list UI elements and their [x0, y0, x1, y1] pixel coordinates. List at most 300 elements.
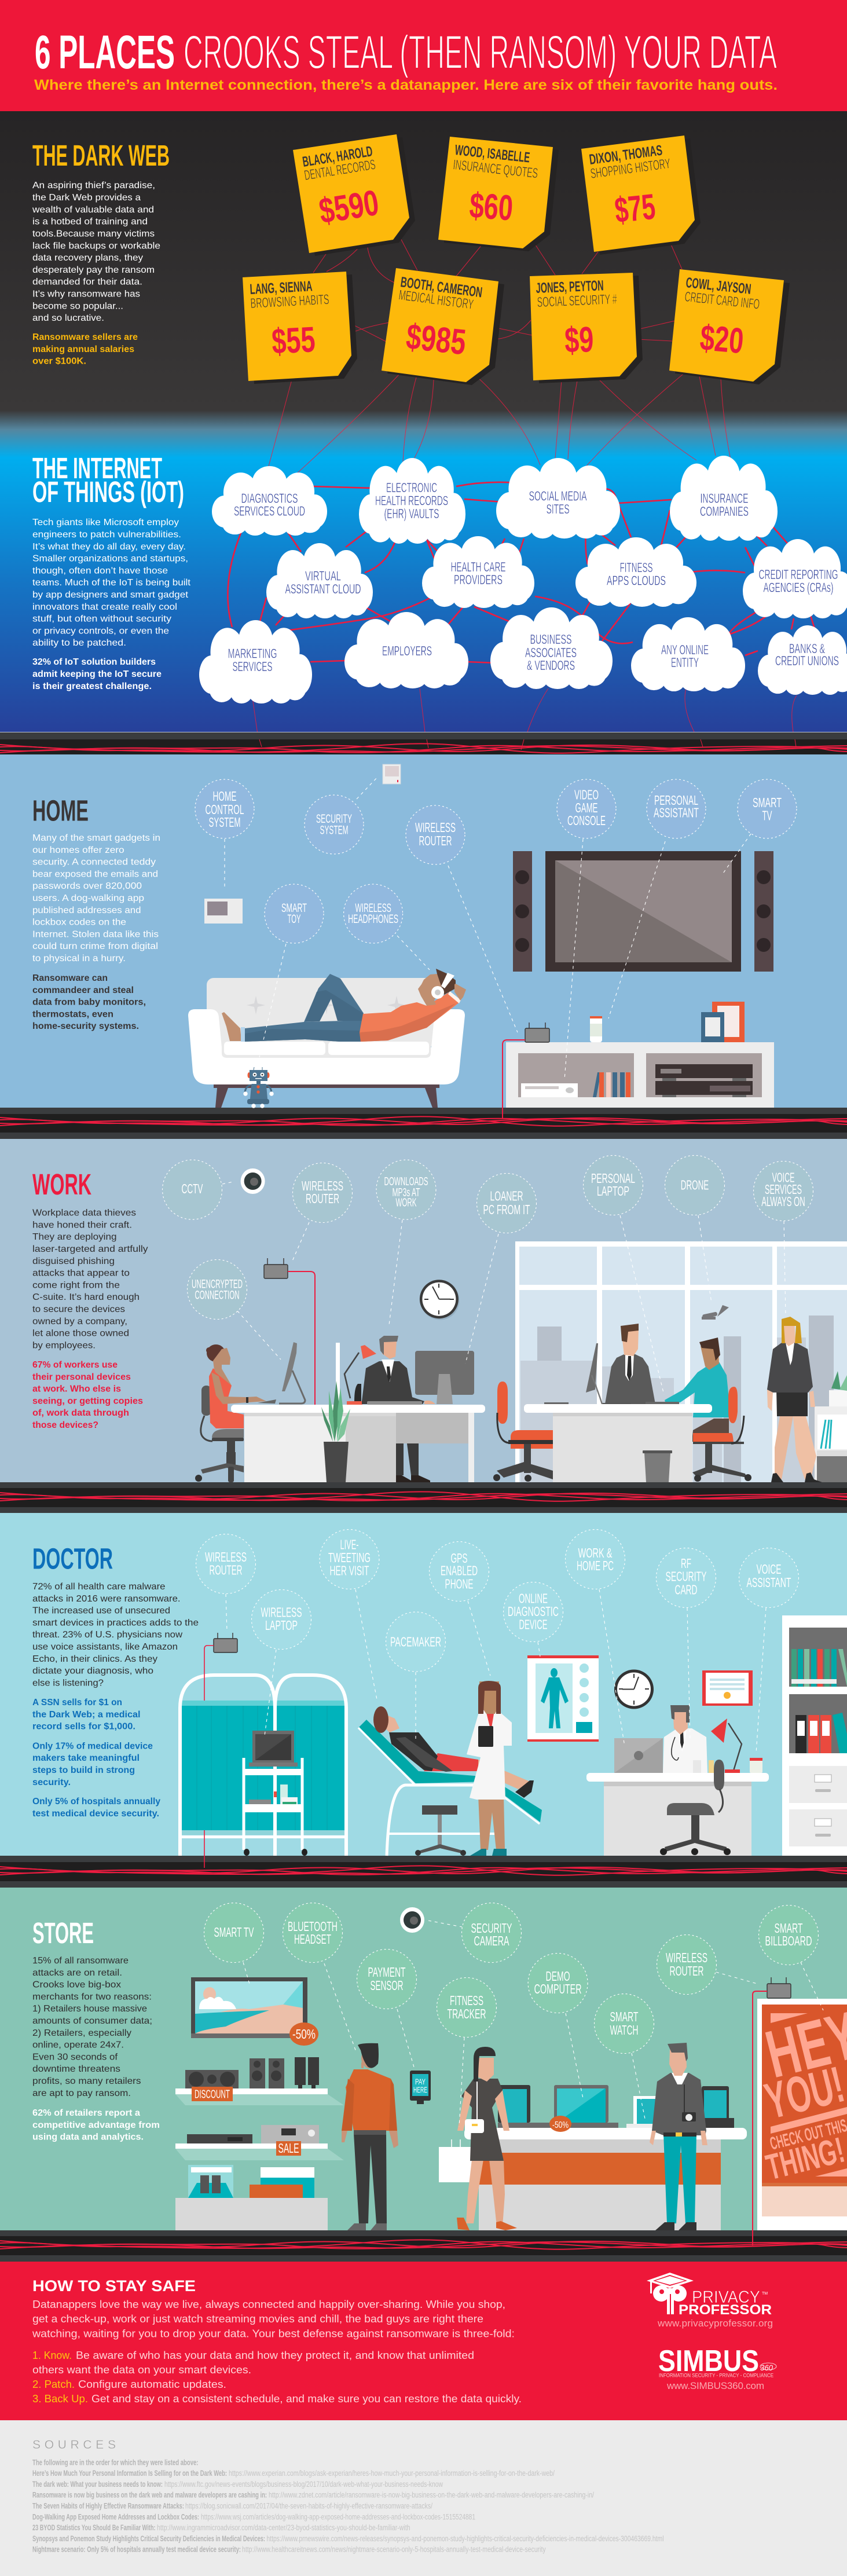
panel: how to stay safe: [0, 2262, 847, 2420]
text block: doctor body: attacks in 2016 were ransomware.: [32, 1594, 181, 1604]
icon: framed certificate: [702, 1670, 753, 1706]
logo: simbus 360: INFORMATION SECURITY - PRIVACY - COMPLIANCE: [659, 2373, 773, 2379]
note: dixon thomas: DIXON, THOMAS: [588, 142, 663, 168]
text block: stay safe intro: get a check-up, work or just watch streaming movies and chill, the bad guys are right there: [32, 2313, 483, 2325]
heading: how to stay safe: HOW TO STAY SAFE: [32, 2277, 196, 2295]
text block: work body: [32, 1208, 148, 1350]
illustration: bookcase: [782, 1615, 847, 1856]
callout: personal devices at work: [32, 1360, 143, 1430]
icon: security camera: [241, 1168, 265, 1194]
floor bands with wires: [0, 732, 847, 2262]
icon: router and red wire: [264, 1258, 315, 1405]
bubble: gps enabled phone: GPS: [450, 1551, 468, 1566]
wire: router to floor: [503, 1040, 525, 1119]
bubble: smart tv: [204, 1903, 264, 1963]
panel: work: [0, 1139, 847, 1482]
list: source citations: https://blog.sonicwall.com/2017/04/the-seven-habits-of-highly-effective-ransomware-attacks/: [185, 2501, 432, 2511]
bubble: pacemaker: PACEMAKER: [390, 1635, 441, 1650]
logo: privacy professor: TM: [762, 2292, 768, 2296]
text block: work body: have honed their craft.: [32, 1220, 132, 1230]
bubble: home control system: HOME: [213, 789, 236, 804]
cloud: business associates: & VENDORS: [527, 658, 575, 673]
text block: store body: 1) Retailers house massive: [32, 2004, 147, 2014]
text block: dark web body: the Dark Web provides a: [32, 193, 141, 203]
bubble: smart toy: TOY: [287, 913, 301, 926]
note: booth cameron: BOOTH, CAMERON: [399, 274, 483, 301]
bubble: wireless router: [406, 805, 465, 864]
bubble: rf security card: SECURITY: [666, 1569, 706, 1584]
cloud: health care providers: HEALTH CARE: [450, 559, 506, 574]
tag: discount: [192, 2087, 233, 2101]
bubble: smart tv: SMART TV: [214, 1925, 254, 1940]
text block: dark web body: tools.Because many victims: [32, 229, 155, 239]
callout: ransomware salaries: [32, 332, 138, 367]
callout: iot solution builders: [32, 657, 162, 691]
bubble: voice services always on: SERVICES: [765, 1182, 802, 1197]
text block: dark web body: become so popular...: [32, 301, 123, 311]
text block: iot body: Smaller organizations and startups,: [32, 554, 188, 564]
cloud: social media sites: SITES: [547, 501, 570, 516]
bubble: cctv: CCTV: [182, 1181, 203, 1196]
bubble: home control system: [195, 779, 254, 838]
heading: work: WORK: [32, 1168, 91, 1201]
bubble: fitness tracker: TRACKER: [447, 2006, 486, 2021]
bubble: loaner pc from it: PC FROM IT: [483, 1202, 530, 1217]
text block: work body: They are deploying: [32, 1232, 117, 1242]
bubble: wireless router: WIRELESS: [415, 820, 456, 835]
text block: doctor body: dictate your diagnosis, who: [32, 1666, 153, 1676]
note: jones peyton: $9: [564, 320, 594, 361]
list: three-fold defense: 1. Know.: [32, 2350, 72, 2361]
text block: iot body: though, often don’t have those: [32, 566, 168, 576]
bubble: security system: [305, 795, 364, 854]
heading: doctor: DOCTOR: [32, 1542, 113, 1575]
cloud: credit reporting agencies: [743, 539, 847, 618]
illustration: boxes on stand: [175, 2165, 328, 2230]
bubble: wireless router: [293, 1163, 352, 1223]
note: cowl jayson: [669, 269, 790, 384]
badge: minus fifty percent on laptop: [549, 2116, 571, 2132]
bubble: live tweeting her visit: [320, 1530, 379, 1589]
bubble: pacemaker: [386, 1612, 446, 1672]
bubble: loaner pc from it: [477, 1173, 536, 1233]
callout: personal devices at work: seeing, or getting copies: [32, 1396, 143, 1406]
bubble: voice services always on: [754, 1161, 813, 1221]
note: lang sienna: $55: [271, 320, 316, 362]
text block: stay safe intro: Datanappers love the way we live, always connected and happily over-sharing. While you shop,: [32, 2299, 505, 2310]
illustration: desk and chair: [586, 1760, 769, 1856]
bubble: wireless router: ROUTER: [306, 1191, 339, 1206]
bubble: rf security card: RF: [681, 1556, 691, 1571]
cloud: marketing services: [199, 620, 312, 703]
text block: home body: lockbox codes on the: [32, 918, 126, 928]
bubble: smart toy: SMART: [281, 902, 307, 915]
bubble: security camera: CAMERA: [474, 1933, 509, 1948]
list: source citations: Here’s How Much Your Personal Information Is Selling for on the Dark Web:: [32, 2469, 227, 2478]
text block: home body: users. A dog-walking app: [32, 893, 144, 903]
text block: iot body: innovators that create really cool: [32, 602, 177, 612]
text block: doctor body: Echo, in their clinics. As they: [32, 1654, 157, 1664]
bubble: wireless router: ROUTER: [669, 1963, 704, 1978]
text block: home body: to physical in a hurry.: [32, 954, 126, 963]
bubble: unencrypted connection: [188, 1260, 247, 1319]
bubble: drone: [665, 1156, 725, 1215]
bubble: payment sensor: [357, 1949, 417, 2009]
callout: ssn price: [32, 1698, 140, 1732]
list: source citations: Ransomware is now big business on the dark web and malware developers are cashing in:: [32, 2491, 267, 2500]
list: source citations: https://www.prnewswire.com/news-releases/synopsys-and-ponemon-study-highlights-critical-security-deficiencies-in-medical-devices-300463669.html: [266, 2534, 663, 2543]
illustration: patient: [373, 1706, 534, 1798]
cloud: fitness apps: [575, 537, 696, 607]
list: source citations: https://www.ftc.gov/news-events/blogs/business-blog/2017/10/dark-web-what-your-business-needs-know: [164, 2480, 443, 2489]
text block: iot body: by app designers and smart gadget: [32, 590, 189, 600]
heading: the internet of things: THE INTERNET: [32, 452, 162, 485]
list: three-fold defense: [32, 2350, 522, 2405]
bubble: unencrypted connection: UNENCRYPTED: [192, 1277, 243, 1291]
panel: header: [0, 0, 847, 111]
text block: dark web body: demanded for their data.: [32, 277, 142, 287]
illustration: smart tv: [191, 1977, 307, 2038]
list: three-fold defense: 3. Back Up.: [32, 2393, 88, 2405]
illustration: curtain and cart: [180, 1675, 347, 1856]
callout: ssn price: the Dark Web; a medical: [32, 1710, 140, 1720]
note: black harold: BLACK, HAROLD: [302, 143, 373, 170]
illustration: left desk: [231, 1405, 485, 1482]
tag: discount: DISCOUNT: [195, 2088, 230, 2101]
illustration: smart billboard: [757, 1997, 847, 2230]
bubble: security system: SECURITY: [316, 812, 352, 826]
text block: iot body: It’s what they do all day, every day.: [32, 542, 186, 552]
bubble: drone: DRONE: [681, 1178, 709, 1193]
bubble: smart billboard: SMART: [775, 1921, 802, 1936]
note: booth cameron: $985: [404, 317, 468, 362]
bubble: smart watch: WATCH: [610, 2022, 638, 2038]
bubble: wireless headphones: WIRELESS: [355, 902, 391, 915]
note: wood isabelle: WOOD, ISABELLE: [454, 142, 531, 166]
text block: doctor body: [32, 1582, 199, 1688]
icon: wall clock: [420, 1280, 460, 1320]
text block: work body: disguised phishing: [32, 1256, 115, 1266]
illustration: doctor at desk: [614, 1705, 762, 1773]
bubble: voice assistant: [739, 1548, 799, 1607]
list: three-fold defense: 2. Patch.: [32, 2379, 75, 2390]
callout: iot solution builders: 32% of IoT solution builders: [32, 657, 156, 667]
cloud: fitness apps: APPS CLOUDS: [607, 573, 666, 588]
text block: stay safe intro: watching, waiting for you to drop your data. Your best defense against ransomware is three-fold:: [32, 2328, 515, 2339]
illustration: potted plant: [321, 1381, 350, 1482]
heading: sources: SOURCES: [32, 2438, 116, 2452]
bubble: downloads mp3s at work: WORK: [396, 1197, 417, 1210]
icon: router and red wire: [204, 1633, 237, 1868]
cloud: employers: [344, 612, 468, 688]
text block: store body: Crooks love big-box: [32, 1980, 121, 1990]
bubble: gps enabled phone: PHONE: [445, 1577, 474, 1592]
callout: retailers competitive advantage: [32, 2108, 160, 2142]
bubble: video game console: GAME: [575, 800, 597, 815]
bubble: wireless router: ROUTER: [210, 1563, 242, 1578]
note: cowl jayson: $20: [698, 318, 745, 361]
text block: work body: come right from the: [32, 1280, 120, 1290]
bubble: smart watch: [594, 1994, 654, 2053]
text block: store body: 15% of all ransomware: [32, 1956, 129, 1966]
leaders: store dashed lines: [243, 1921, 823, 2127]
bubble: home control system: SYSTEM: [208, 815, 241, 830]
bubble: wireless laptop: [251, 1590, 311, 1649]
text block: home body: bear exposed the emails and: [32, 869, 158, 879]
callout: hospitals testing: test medical device security.: [32, 1809, 159, 1819]
callout: ransomware can commandeer: [32, 973, 146, 1031]
list: source citations: The dark web: What your business needs to know:: [32, 2480, 163, 2489]
bubble: home control system: CONTROL: [205, 802, 244, 817]
bubble: online diagnostic device: DEVICE: [519, 1617, 548, 1632]
bubble: voice services always on: ALWAYS ON: [761, 1194, 805, 1209]
illustration: woman at desk: [195, 1342, 305, 1482]
bubble: live tweeting her visit: TWEETING: [328, 1550, 371, 1565]
logo: privacy professor: [647, 2273, 773, 2329]
cloud: electronic health records: (EHR) VAULTS: [384, 506, 439, 521]
title: 6 PLACES: [35, 26, 175, 79]
cloud: virtual assistant: VIRTUAL: [305, 568, 341, 583]
icon: payment phone: [410, 2071, 431, 2104]
callout: ssn price: A SSN sells for $1 on: [32, 1698, 122, 1707]
text block: iot body: ability to be patched.: [32, 638, 126, 648]
bubble: voice assistant: ASSISTANT: [747, 1575, 791, 1590]
callout: hospitals testing: Only 5% of hospitals annually: [32, 1797, 160, 1807]
cloud: electronic health records: HEALTH RECORDS: [375, 493, 448, 508]
bubble: demo computer: [528, 1954, 588, 2013]
text block: work body: attacks that appear to: [32, 1269, 130, 1278]
bubble: live tweeting her visit: LIVE-: [340, 1537, 359, 1552]
note: booth cameron: MEDICAL HISTORY: [398, 287, 475, 313]
bubble: smart watch: SMART: [610, 2009, 638, 2024]
icon: doctor office clock: [614, 1670, 654, 1709]
callout: retailers competitive advantage: 62% of retailers report a: [32, 2108, 140, 2118]
bubble: wireless router: WIRELESS: [205, 1549, 247, 1564]
bubble: wireless laptop: WIRELESS: [261, 1605, 302, 1620]
callout: ransomware can commandeer: home-security systems.: [32, 1021, 139, 1031]
badge: minus fifty percent: [289, 2022, 318, 2046]
text block: store body: Even 30 seconds of: [32, 2052, 118, 2062]
panel: dark web and internet of things background: [0, 111, 847, 732]
tag: sale: [276, 2141, 301, 2156]
bubble: security system: SYSTEM: [320, 823, 349, 837]
cloud: business associates: BUSINESS: [530, 632, 572, 647]
illustration: office window and city: [515, 1241, 847, 1482]
text block: doctor body: The increased use of unsecured: [32, 1606, 170, 1616]
bubble: smart billboard: [758, 1905, 819, 1965]
text block: doctor body: 72% of all health care malware: [32, 1582, 166, 1592]
list: source citations: The Seven Habits of Highly Effective Ransomware Attacks:: [32, 2501, 184, 2511]
cloud: health care providers: [422, 536, 534, 608]
bubble: bluetooth headset: HEADSET: [294, 1932, 331, 1947]
list: three-fold defense: others want the data on your smart devices.: [32, 2364, 251, 2376]
text block: home body: passwords over 820,000: [32, 881, 142, 891]
note: jones peyton: JONES, PEYTON: [536, 277, 604, 296]
bubble: personal laptop: LAPTOP: [597, 1183, 629, 1199]
leaders: home dashed lines: [225, 776, 751, 1080]
icon: drone: [696, 1305, 729, 1320]
bubble: work and home pc: WORK &: [578, 1545, 613, 1560]
callout: retailers competitive advantage: competitive advantage from: [32, 2120, 160, 2130]
illustration: woman walking and side shelf: [767, 1317, 847, 1482]
text block: home body: could turn crime from digital: [32, 941, 158, 951]
panel: internet of things: [32, 452, 847, 703]
heading: store: STORE: [32, 1917, 94, 1950]
bubble: wireless laptop: LAPTOP: [265, 1618, 298, 1633]
panel: the dark web: [32, 134, 790, 385]
icon: picture frames: [701, 1002, 745, 1042]
icon: router: [525, 1023, 549, 1042]
icon: thermostat: [204, 899, 243, 924]
note: jones peyton: [530, 273, 643, 383]
callout: ransomware can commandeer: commandeer and steal: [32, 985, 134, 995]
cloud: business associates: ASSOCIATES: [525, 645, 577, 660]
text block: work body: laser-targeted and artfully: [32, 1244, 148, 1254]
text block: dark web body: wealth of valuable data and: [32, 205, 154, 215]
text block: iot body: [32, 518, 191, 648]
illustration: man with headphones on sofa: [222, 969, 466, 1042]
bubble: wireless router: WIRELESS: [302, 1178, 343, 1193]
callout: iot solution builders: admit keeping the IoT secure: [32, 669, 162, 679]
logo: privacy professor: PRIVACY: [692, 2288, 760, 2307]
bubble: work and home pc: HOME PC: [577, 1558, 614, 1573]
list: source citations: 23 BYOD Statistics You Should Be Familiar With:: [32, 2523, 155, 2532]
bubble: wireless router: [196, 1534, 256, 1593]
list: three-fold defense: Get and stay on a consistent schedule, and make sure you can restore the data quickly.: [91, 2393, 522, 2405]
bubble: payment sensor: PAYMENT: [368, 1965, 405, 1980]
text block: dark web body: and so lucrative.: [32, 313, 104, 323]
icon: router and red wire: [753, 1977, 791, 2245]
text block: work body: owned by a company,: [32, 1317, 127, 1327]
wires: note and cloud connections: [228, 236, 816, 750]
text block: store body: merchants for two reasons:: [32, 1992, 152, 2002]
cloud: business associates: [490, 607, 613, 689]
bubble: downloads mp3s at work: DOWNLOADS: [384, 1175, 428, 1188]
illustration: female doctor: [467, 1681, 512, 1856]
icon: payment phone: PAY: [415, 2077, 426, 2086]
note: wood isabelle: $60: [468, 186, 514, 229]
text block: iot body: or privacy controls, or even the: [32, 626, 169, 636]
note: lang sienna: [243, 272, 357, 384]
badge: minus fifty percent: -50%: [292, 2027, 316, 2042]
bubble: online diagnostic device: DIAGNOSTIC: [508, 1604, 559, 1619]
cloud: diagnostics services: [212, 466, 327, 536]
icon: smart speaker: [590, 1016, 602, 1042]
illustration: media console: [506, 1042, 774, 1108]
text block: work body: Workplace data thieves: [32, 1208, 136, 1218]
cloud: diagnostics services: SERVICES CLOUD: [234, 504, 305, 519]
bubble: demo computer: DEMO: [546, 1969, 570, 1984]
illustration: right desk with chair and trash can: [493, 1382, 712, 1482]
bubble: wireless router: WIRELESS: [666, 1950, 707, 1965]
heading: the dark web: THE DARK WEB: [32, 139, 170, 172]
text block: store body: profits, so many retailers: [32, 2076, 141, 2086]
bubble: security camera: [462, 1903, 521, 1963]
note: lang sienna: LANG, SIENNA: [250, 278, 313, 298]
text block: store body: [32, 1956, 152, 2098]
logo: simbus 360: www.SIMBUS360.com: [666, 2380, 764, 2391]
text block: iot body: stuff, but often without security: [32, 614, 171, 624]
bubble: wireless router: ROUTER: [419, 833, 452, 848]
bubble: rf security card: [657, 1548, 716, 1607]
text block: store body: downtime threatens: [32, 2064, 120, 2074]
text block: dark web body: desperately pay the ransom: [32, 265, 155, 275]
bubble: loaner pc from it: LOANER: [490, 1188, 523, 1203]
heading: the internet of things: OF THINGS (IOT): [32, 475, 184, 508]
text block: stay safe intro: [32, 2299, 515, 2339]
text block: store body: attacks are on retail.: [32, 1968, 122, 1978]
text block: store body: amounts of consumer data;: [32, 2016, 152, 2026]
cloud: virtual assistant: ASSISTANT CLOUD: [285, 581, 361, 596]
note: black harold: $590: [317, 183, 382, 232]
text block: home body: published addresses and: [32, 906, 141, 915]
bubble: personal laptop: PERSONAL: [591, 1171, 635, 1186]
heading: home: HOME: [32, 794, 89, 827]
bubble: rf security card: CARD: [675, 1582, 697, 1597]
bubble: fitness tracker: FITNESS: [450, 1993, 483, 2008]
note: cowl jayson: COWL, JAYSON: [685, 274, 752, 298]
list: source citations: Dog-Walking App Exposed Home Addresses and Lockbox Codes:: [32, 2512, 199, 2521]
text block: doctor body: smart devices in practices adds to the: [32, 1618, 199, 1628]
illustration: standing man and seated man: [586, 1324, 751, 1482]
note: jones peyton: SOCIAL SECURITY #: [537, 291, 618, 310]
cloud: insurance companies: INSURANCE: [701, 491, 748, 506]
cloud: insurance companies: COMPANIES: [700, 504, 749, 519]
callout: personal devices at work: at work. Who else is: [32, 1384, 121, 1394]
callout: iot solution builders: is their greatest challenge.: [32, 681, 152, 691]
bubble: personal assistant: PERSONAL: [654, 793, 698, 808]
bubble: wireless router: [657, 1935, 717, 1994]
bubble: security camera: SECURITY: [471, 1921, 512, 1936]
callout: medical device makers: steps to build in strong: [32, 1765, 135, 1775]
bubble: bluetooth headset: [283, 1903, 343, 1963]
list: source citations: https://www.wsj.com/articles/dog-walking-app-exposed-home-addresses-and-lockbox-codes-1515524881: [201, 2512, 475, 2521]
text block: home body: [32, 833, 160, 963]
note: booth cameron: [382, 268, 504, 385]
illustration: speaker shelf: [175, 2057, 344, 2105]
bubble: gps enabled phone: [430, 1541, 489, 1602]
bubble: smart tv: TV: [762, 808, 772, 823]
cloud: fitness apps: FITNESS: [619, 560, 653, 575]
illustration: woman shopper: [439, 2047, 517, 2230]
bubble: personal laptop: [584, 1156, 643, 1215]
logo: privacy professor: www.privacyprofessor.org: [657, 2318, 773, 2329]
illustration: man with camera: [650, 2043, 707, 2230]
bubble: work and home pc: [565, 1530, 625, 1589]
list: source citations: The following are in the order for which they were listed above:: [32, 2458, 198, 2467]
bubble: personal assistant: [647, 779, 706, 838]
note: dixon thomas: SHOPPING HISTORY: [589, 156, 672, 182]
text block: dark web body: data recovery plans, they: [32, 253, 143, 263]
text block: work body: to secure the devices: [32, 1305, 125, 1314]
bubble: voice services always on: VOICE: [772, 1170, 794, 1185]
callout: personal devices at work: of, work data through: [32, 1408, 129, 1418]
icon: payment phone: HERE: [413, 2085, 427, 2094]
illustration: speakers and television: [513, 851, 773, 972]
text block: doctor body: threat. 23% of U.S. physicians now: [32, 1630, 182, 1640]
cloud: employers: EMPLOYERS: [382, 643, 432, 658]
cloud: any online entity: ENTITY: [671, 655, 699, 670]
text block: work body: by employees.: [32, 1340, 96, 1350]
callout: ssn price: record sells for $1,000.: [32, 1722, 135, 1732]
callout: hospitals testing: [32, 1797, 160, 1819]
text block: home body: security. A connected teddy: [32, 858, 156, 867]
text block: dark web body: is a hotbed of training and: [32, 217, 148, 227]
callout: personal devices at work: their personal devices: [32, 1372, 131, 1382]
panel: store: [0, 1888, 847, 2245]
illustration: laptops: [498, 2085, 734, 2128]
bubble: cctv: [162, 1160, 222, 1219]
